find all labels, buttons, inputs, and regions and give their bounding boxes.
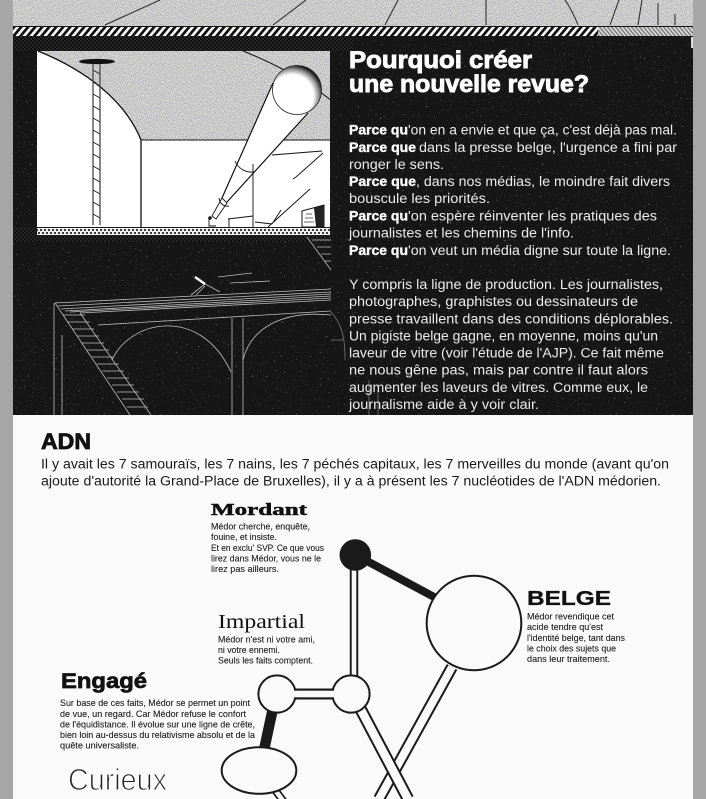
text block: reasons: 'on espère réinventer les pratiques des: [408, 208, 657, 223]
ladder: [79, 59, 115, 225]
text block: reasons: dans la presse belge, l'urgence a fini par: [419, 140, 678, 155]
text block: reasons: 'on veut un média digne sur toute la ligne.: [408, 243, 671, 258]
text block: ADN introduction: [41, 456, 669, 488]
label: Engagé: Engagé: [61, 670, 147, 693]
diagram: DNA molecule: [222, 539, 521, 799]
label: Curieux: Curieux: [68, 762, 167, 797]
label: Belge: l'identité belge, tant dans: [527, 633, 626, 643]
label: Mordant: Et en exclu' SVP. Ce que vous: [211, 543, 325, 553]
label: Engagé: bien loin au-dessus du relativisme absolu et de la: [60, 730, 255, 740]
label: Mordant: Médor cherche, enquête,: [211, 522, 310, 532]
heading: why a new magazine: [349, 47, 589, 98]
checkered floor band: [37, 228, 330, 235]
link: left node to right node: [290, 688, 338, 700]
label: Mordant: lirez pas ailleurs.: [211, 564, 279, 574]
label: Belge: le choix des sujets que: [527, 643, 616, 653]
text block: reasons: bouscule les priorités.: [349, 191, 490, 206]
striped band: [13, 27, 693, 36]
node: right: [332, 675, 370, 713]
label: Engagé: quête universaliste.: [60, 741, 139, 751]
text block: production line: Y compris la ligne de production. Les journalistes,: [349, 277, 663, 292]
label: Mordant: lirez dans Médor, vous ne le: [211, 553, 321, 563]
text block: production line: [348, 277, 673, 412]
label: Impartial: [218, 611, 315, 666]
panel: ADN: [13, 415, 693, 799]
label: Mordant: Mordant: [211, 500, 307, 519]
text block: ADN introduction: Il y avait les 7 samouraïs, les 7 nains, les 7 péchés capitaux, les 7 merveilles du monde (avant qu'on: [41, 456, 669, 471]
text block: reasons: [348, 123, 678, 258]
text block: reasons: ronger le sens.: [349, 157, 444, 172]
text block: production line: augmenter les laveurs de vitres. Comme eux, le: [349, 380, 648, 395]
label: Belge: BELGE: [527, 588, 611, 610]
text block: reasons: journalistes et les chemins de l'info.: [348, 226, 574, 240]
link: left node to ellipse: [264, 708, 273, 750]
text block: ADN introduction: ajoute d'autorité la Grand-Place de Bruxelles), il y a à présent les 7 nucléotides de l'ADN médorien.: [41, 473, 661, 488]
node: black: [340, 539, 371, 571]
link: ellipse downward: [275, 790, 284, 799]
text block: production line: photographes, graphistes ou dessinateurs de: [349, 294, 638, 309]
text block: production line: Un pigiste belge gagne, en moyenne, moins qu'un: [349, 328, 658, 344]
heading: why a new magazine: une nouvelle revue?: [349, 71, 589, 98]
label: Engagé: de l'équidistance. Il évolue sur une ligne de crête,: [60, 719, 255, 729]
label: Impartial: Seuls les faits comptent.: [218, 656, 313, 666]
node: left: [258, 675, 296, 713]
node cover: joins link to circles: [293, 691, 335, 697]
heading: why a new magazine: Pourquoi créer: [349, 47, 532, 74]
text block: reasons: Parce que: [349, 140, 416, 155]
panel: why a new magazine: [13, 36, 693, 415]
illustration: telescope in vaulted room: [37, 51, 353, 227]
link: black node to big circle: [365, 560, 436, 598]
label: Impartial: Médor n'est ni votre ami,: [218, 634, 315, 644]
text block: production line: journalisme aide à y voir clair.: [348, 397, 539, 412]
text block: production line: presse travaillent dans des conditions déplorables.: [349, 311, 673, 326]
telescope beam: [222, 83, 308, 202]
label: Mordant: fouine, et insiste.: [211, 532, 277, 542]
label: Belge: dans leur traitement.: [527, 654, 610, 664]
text block: production line: laveur de vitre (voir l'étude de l'AJP). Ce fait même: [349, 346, 664, 361]
label: Engagé: [60, 670, 255, 751]
text block: reasons: , dans nos médias, le moindre fait divers: [416, 174, 670, 189]
text block: reasons: Parce qu: [349, 123, 408, 138]
label: Engagé: de vue, un regard. Car Médor refuse le confort: [60, 709, 247, 719]
label: Belge: [527, 588, 626, 664]
link: big circle to lower crossing: [379, 667, 452, 799]
label: Impartial: Impartial: [218, 611, 306, 633]
panel: textured top strip: [13, 0, 693, 27]
illustration: lower deck line drawing: [54, 237, 378, 415]
link: right node to lower crossing: [360, 708, 408, 799]
link: black node to right node: [350, 565, 358, 680]
small figure and debris: [209, 151, 323, 227]
text block: reasons: Parce qu: [349, 208, 408, 223]
label: Impartial: ni votre ennemi.: [218, 645, 280, 655]
node: big circle: [427, 576, 521, 670]
label: Mordant: [211, 500, 325, 574]
heading: ADN: ADN: [41, 429, 91, 454]
label: Belge: Médor revendique cet: [527, 612, 615, 622]
text block: reasons: Parce que: [349, 174, 416, 189]
label: Belge: acide tendre qu'est: [527, 622, 604, 632]
node: ellipse: [222, 747, 296, 794]
text block: reasons: 'on en a envie et que ça, c'est déjà pas mal.: [408, 123, 677, 138]
text block: reasons: Parce qu: [349, 243, 408, 258]
label: Engagé: Sur base de ces faits, Médor se permet un point: [60, 698, 251, 708]
text block: production line: ne nous gêne pas, mais par contre il faut alors: [349, 363, 648, 378]
